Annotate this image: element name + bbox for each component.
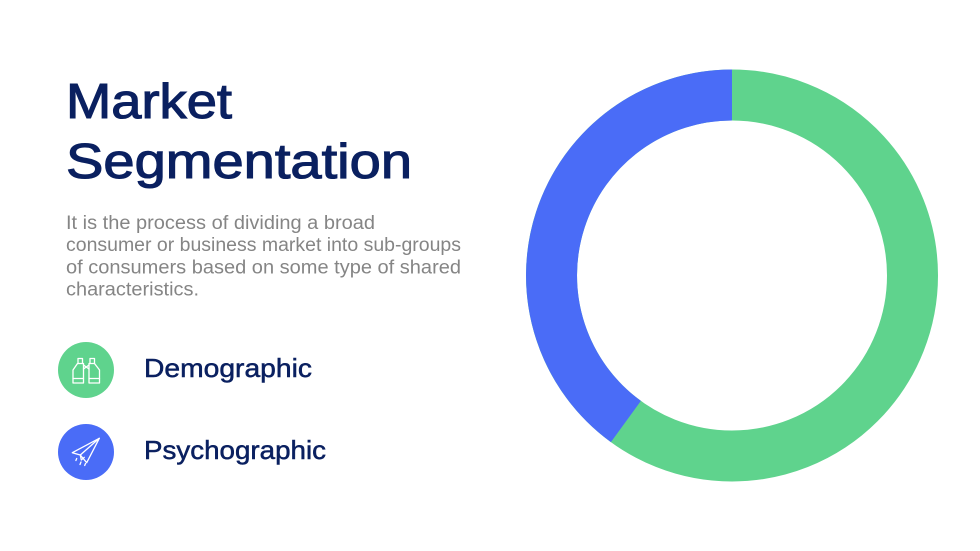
description text: consumer or business market into sub-groups bbox=[66, 235, 461, 256]
description text: of consumers based on some type of shared bbox=[66, 258, 461, 278]
segment: Demographic green bbox=[552, 95, 912, 456]
title bbox=[66, 75, 412, 189]
icon: binoculars on green circle bbox=[58, 342, 114, 398]
description text: characteristics. bbox=[66, 280, 199, 300]
title: Segmentation bbox=[66, 135, 412, 189]
donut chart bbox=[552, 95, 912, 456]
segment: Psychographic blue bbox=[552, 95, 732, 422]
title: Market bbox=[66, 75, 232, 129]
icon: paper plane on blue circle bbox=[58, 424, 114, 480]
legend label: Psychographic: Psychographic bbox=[144, 435, 326, 465]
description text bbox=[66, 213, 461, 300]
legend label: Demographic: Demographic bbox=[144, 353, 312, 383]
description text: It is the process of dividing a broad bbox=[66, 213, 375, 234]
